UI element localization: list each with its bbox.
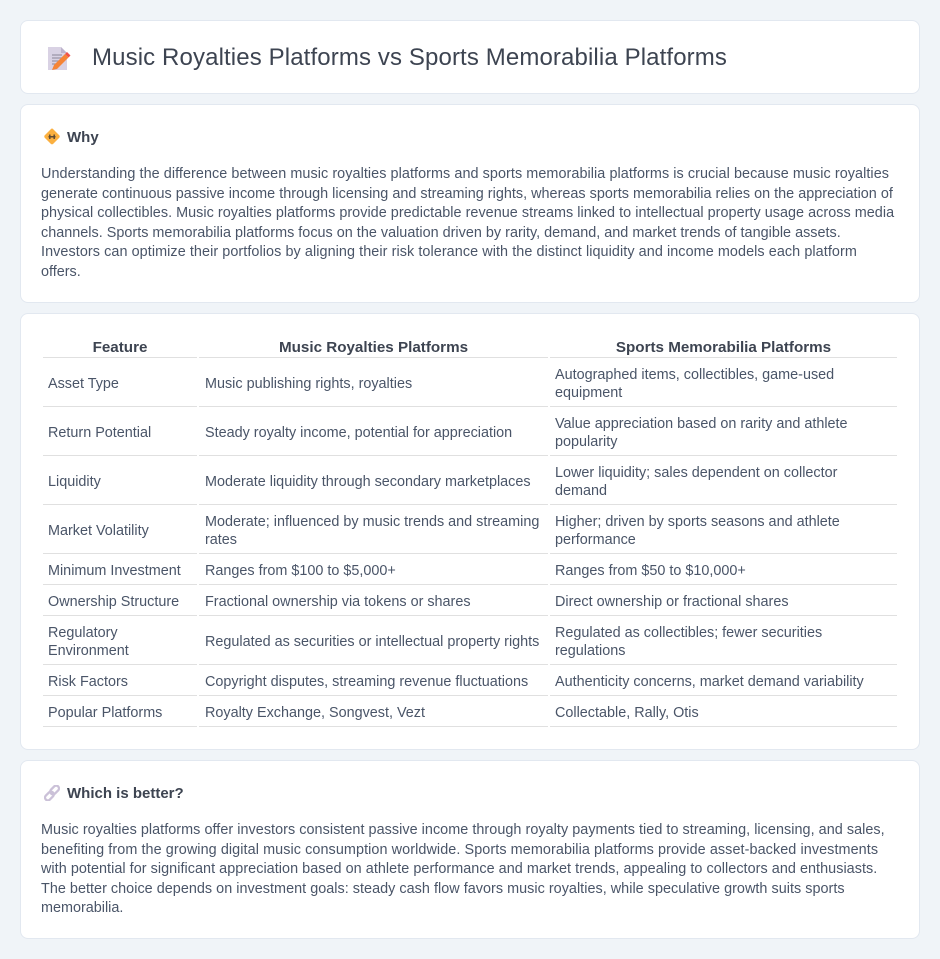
text: demand — [555, 483, 607, 499]
text: popularity — [555, 434, 617, 450]
table header: music royalties — [199, 337, 548, 358]
text block: why paragraph: generate continuous passive income through licensing and streaming rights, whereas sports memorabilia relies on the appreciation of — [41, 186, 893, 202]
text: Fractional ownership via tokens or shares — [205, 594, 471, 610]
row: minimum investment: Minimum Investment — [48, 563, 181, 579]
table header: sports memorabilia: Sports Memorabilia Platforms — [616, 339, 831, 356]
text: Royalty Exchange, Songvest, Vezt — [205, 705, 425, 721]
text block: why paragraph: offers. — [41, 264, 81, 280]
text block: which is better paragraph — [41, 822, 885, 916]
text block: why paragraph: physical collectibles. Music royalties platforms provide predictable revenue streams linked to intellectual property usage across media — [41, 205, 894, 221]
row: liquidity: Liquidity — [48, 474, 101, 490]
text: equipment — [555, 385, 622, 401]
text: performance — [555, 532, 636, 548]
text: Lower liquidity; sales dependent on collector — [555, 465, 837, 481]
text block: why paragraph: Investors can optimize their portfolios by aligning their risk tolerance with the distinct liquidity and income models each platform — [41, 244, 857, 260]
text: Copyright disputes, streaming revenue fluctuations — [205, 674, 528, 690]
row: ownership structure: Ownership Structure — [48, 594, 179, 610]
panel: comparison table — [20, 313, 920, 750]
heading: which is better: Which is better? — [67, 785, 184, 802]
text: Direct ownership or fractional shares — [555, 594, 789, 610]
text block: which is better paragraph: benefiting from the growing digital music consumption worldwide. Sports memorabilia platforms provide asset-backed investments — [41, 842, 878, 858]
icon: memo with pencil — [48, 47, 70, 70]
table header: feature — [43, 337, 197, 358]
text: Higher; driven by sports seasons and athlete — [555, 514, 840, 530]
panel: which is better — [20, 760, 920, 939]
text block: which is better paragraph: with potential for significant appreciation based on athlete performance and market trends, appealing to collectors and enthusiasts. — [41, 861, 877, 877]
text: Regulated as collectibles; fewer securities — [555, 625, 822, 641]
text block: which is better paragraph: memorabilia. — [41, 900, 123, 916]
text: rates — [205, 532, 237, 548]
row: market volatility: Market Volatility — [48, 523, 149, 539]
text block: which is better paragraph: The better choice depends on investment goals: steady cash flow favors music royalties, while speculative growth suits sports — [41, 881, 845, 897]
text: Ranges from $50 to $10,000+ — [555, 563, 746, 579]
text: Autographed items, collectibles, game-used — [555, 367, 834, 383]
icon: diamond sign — [44, 128, 60, 144]
row: regulatory environment: Environment — [48, 643, 129, 659]
row: risk factors: Risk Factors — [48, 674, 128, 690]
text block: why paragraph: channels. Sports memorabilia platforms focus on the valuation driven by rarity, demand, and market trends of tangible assets. — [41, 225, 841, 241]
row: regulatory environment — [48, 625, 129, 659]
text: Music publishing rights, royalties — [205, 376, 412, 392]
row: regulatory environment: Regulatory — [48, 625, 118, 641]
text: Regulated as securities or intellectual property rights — [205, 634, 539, 650]
table header: music royalties: Music Royalties Platforms — [279, 339, 468, 356]
panel: header — [20, 20, 920, 94]
text: regulations — [555, 643, 625, 659]
table header: sports memorabilia — [550, 337, 897, 358]
text: Ranges from $100 to $5,000+ — [205, 563, 396, 579]
text block: why paragraph — [41, 166, 894, 280]
text block: which is better paragraph: Music royalties platforms offer investors consistent passive income through royalty payments tied to streaming, licensing, and sales, — [41, 822, 885, 838]
text: Moderate; influenced by music trends and streaming — [205, 514, 539, 530]
row: popular platforms: Popular Platforms — [48, 705, 162, 721]
text: Steady royalty income, potential for appreciation — [205, 425, 512, 441]
icon: link — [44, 785, 60, 801]
row: asset type: Asset Type — [48, 376, 119, 392]
text: Collectable, Rally, Otis — [555, 705, 699, 721]
table header: feature: Feature — [93, 339, 147, 356]
text: Moderate liquidity through secondary marketplaces — [205, 474, 531, 490]
text block: why paragraph: Understanding the difference between music royalties platforms and sports memorabilia platforms is crucial because music royalties — [41, 166, 889, 182]
row: return potential: Return Potential — [48, 425, 151, 441]
text: Value appreciation based on rarity and athlete — [555, 416, 848, 432]
panel: why — [20, 104, 920, 303]
heading: why: Why — [67, 129, 99, 146]
title: Music Royalties Platforms vs Sports Memorabilia Platforms — [92, 44, 727, 71]
text: Authenticity concerns, market demand variability — [555, 674, 864, 690]
